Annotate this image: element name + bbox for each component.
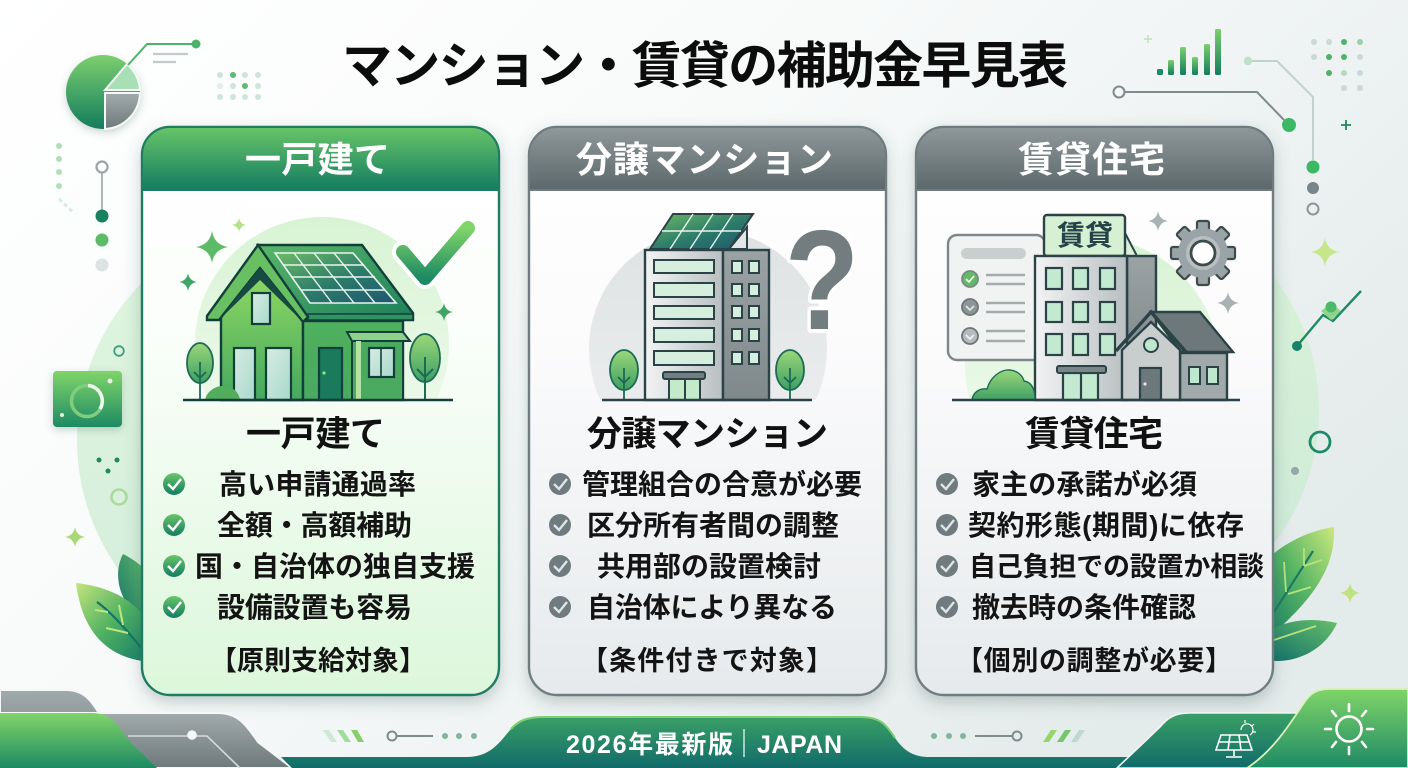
bullet list: [163, 469, 475, 623]
dotted trail left: [56, 143, 74, 213]
illustration: rental building, checklist and gear: [946, 211, 1240, 402]
card header: [529, 127, 886, 190]
bullet list: [936, 468, 1264, 623]
footer label: JAPAN: [757, 731, 842, 759]
bullet list: 設備設置も容易: [217, 592, 412, 623]
footer decoration left: [323, 730, 477, 742]
bullet list: [549, 468, 862, 623]
dot grid top right: [1311, 39, 1363, 91]
small decorations right: [1291, 432, 1360, 603]
vertical node line left: [96, 162, 108, 272]
card header: [142, 127, 499, 190]
panel: 一戸建て: [142, 127, 499, 695]
bullet list: 管理組合の合意が必要: [582, 468, 862, 500]
plus marks: [1144, 35, 1351, 130]
footer note: 【原則支給対象】: [210, 646, 426, 676]
bullet list: 共用部の設置検討: [597, 551, 821, 582]
illustration: apartment with question mark: ?: [785, 201, 859, 360]
subheading: 一戸建て: [246, 415, 385, 454]
illustration: rental building, checklist and gear: 賃貸: [1057, 220, 1113, 251]
card body: [916, 127, 1273, 695]
background green circle left: [77, 284, 141, 569]
subheading: 分譲マンション: [587, 415, 828, 454]
bullet list: 全額・高額補助: [217, 510, 412, 541]
illustration: house with solar panels: [179, 217, 475, 402]
icon: leaves right: [1266, 527, 1337, 661]
bullet list: 自己負担での設置か相談: [969, 552, 1264, 582]
background green circle right: [1274, 278, 1319, 542]
card header: [916, 127, 1273, 190]
circuit line one: [1114, 86, 1296, 132]
header label: 賃貸住宅: [1018, 139, 1165, 180]
footer label: [566, 729, 842, 759]
card body: [529, 127, 886, 695]
icon: solar panel: [1216, 720, 1256, 757]
footer shapes right: [1117, 689, 1408, 768]
circuit line two with nodes: [1244, 57, 1320, 214]
small decorations left: [65, 346, 126, 547]
bullet list: 高い申請通過率: [219, 469, 416, 500]
icon: pie chart: [66, 55, 140, 129]
sparkle right: [1311, 238, 1339, 266]
icon: bar chart top right: [1157, 29, 1221, 75]
footer decoration right: [931, 730, 1085, 742]
card body: [142, 127, 499, 695]
bullet list: 契約形態(期間)に依存: [968, 510, 1244, 541]
footer note: 【条件付きで対象】: [581, 646, 833, 676]
icon: leaves left: [76, 554, 150, 662]
bullet list: 国・自治体の独自支援: [195, 551, 475, 582]
header label: 一戸建て: [245, 139, 390, 180]
illustration: apartment with question mark: [589, 213, 852, 402]
icon: sun: [1325, 704, 1373, 754]
icon: small gauge card: [53, 371, 122, 427]
footer note: 【個別の調整が必要】: [956, 645, 1232, 676]
subheading: 賃貸住宅: [1025, 415, 1163, 454]
panel: 分譲マンション: [529, 127, 886, 695]
pie chart leader line: [128, 40, 200, 65]
bullet list: 家主の承諾が必須: [972, 468, 1197, 500]
header label: 分譲マンション: [576, 139, 833, 180]
bullet list: 自治体により異なる: [587, 592, 837, 623]
dot grid top left: [217, 72, 261, 100]
footer label: 2026年最新版: [566, 731, 733, 759]
title: マンション・賃貸の補助金早見表: [342, 38, 1068, 94]
panel: 賃貸住宅: [916, 127, 1273, 695]
bullet list: 区分所有者間の調整: [587, 510, 839, 541]
bullet list: 撤去時の条件確認: [972, 592, 1196, 623]
trend line right: [1292, 291, 1361, 351]
footer ribbon with title tab: [281, 717, 1128, 768]
footer shapes left: [0, 690, 292, 768]
